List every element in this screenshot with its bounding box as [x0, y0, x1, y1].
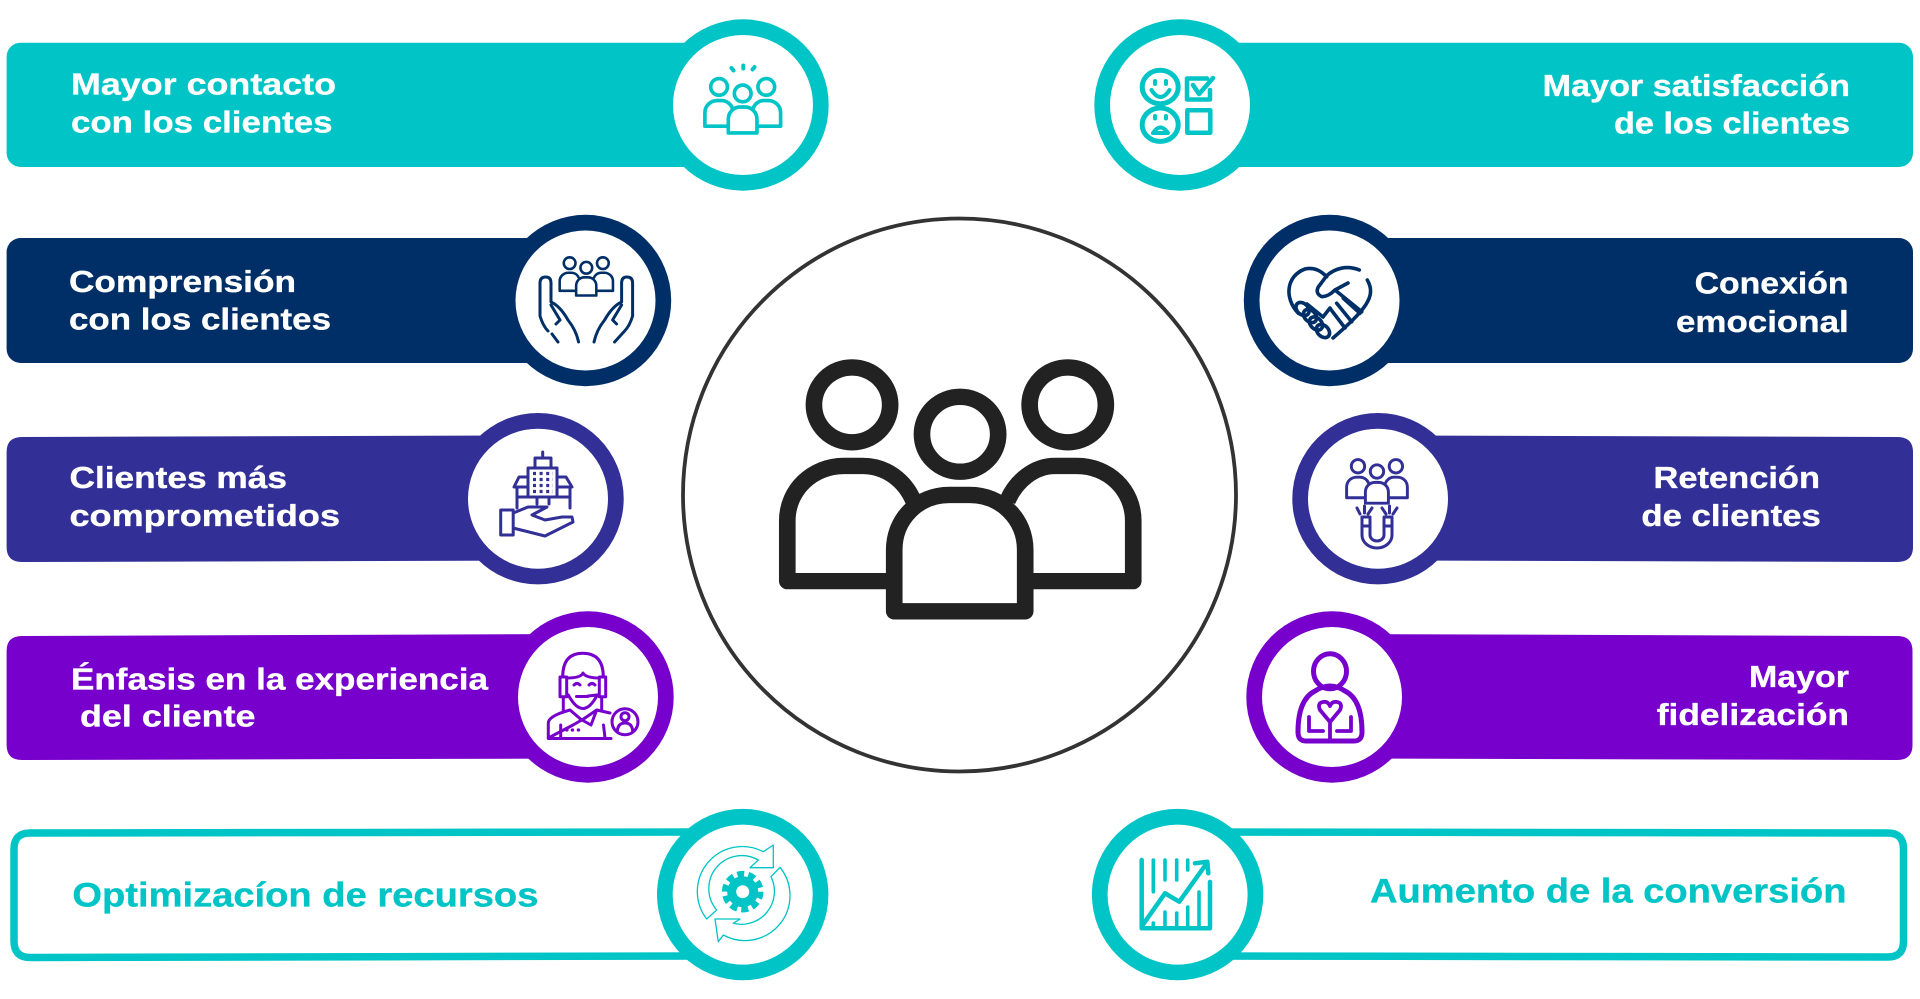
text: de los clientes: de los clientes: [1614, 106, 1850, 140]
icon: customer service agent: [548, 653, 638, 738]
text: con los clientes: con los clientes: [69, 302, 331, 336]
icon: gear with cycle arrows: [697, 845, 790, 942]
heading: Énfasis en la experiencia: Énfasis en la experiencia: [71, 661, 489, 696]
panel: Mayor contacto con los clientes: [7, 19, 829, 191]
icon: people and magnet: [1347, 460, 1407, 548]
heading: Optimizacíon de recursos: Optimizacíon de recursos: [72, 876, 538, 914]
icon: people with rays: [705, 66, 781, 133]
text: fidelización: fidelización: [1657, 697, 1849, 732]
icon: person with heart: [1298, 654, 1362, 741]
icon: group of three people: [787, 367, 1133, 611]
panel: Comprensión con los clientes: [7, 215, 671, 386]
text: del cliente: del cliente: [80, 699, 256, 734]
icon: hands holding people: [540, 257, 633, 342]
icon: smile and sad faces with checkboxes: [1142, 70, 1213, 141]
heading: Conexión: Conexión: [1695, 266, 1849, 300]
heading: Mayor satisfacción: Mayor satisfacción: [1543, 68, 1850, 103]
icon: rising line chart: [1142, 860, 1210, 928]
heading: Aumento de la conversión: Aumento de la conversión: [1370, 873, 1846, 911]
text: de clientes: de clientes: [1641, 498, 1821, 533]
text: emocional: emocional: [1676, 304, 1849, 339]
icon: building in hand: [501, 452, 573, 536]
panel: Mayor fidelización: [1246, 611, 1912, 783]
central circle with people icon: [683, 218, 1236, 772]
panel: Clientes más comprometidos: [7, 413, 624, 584]
panel: Optimización de recursos: [14, 809, 828, 980]
panel: Retención de clientes: [1292, 413, 1913, 584]
heading: Mayor contacto: Mayor contacto: [71, 66, 336, 102]
heading: Comprensión: Comprensión: [69, 264, 296, 299]
panel: Conexión emocional: [1244, 215, 1913, 386]
text: con los clientes: con los clientes: [71, 105, 332, 140]
heading: Mayor: Mayor: [1749, 659, 1849, 694]
heading: Retención: Retención: [1654, 460, 1820, 495]
panel: Aumento de la conversión: [1092, 809, 1904, 980]
heading: Clientes más: Clientes más: [70, 460, 287, 495]
panel: Énfasis en la experiencia del cliente: [7, 611, 674, 783]
panel: Mayor satisfacción de los clientes: [1094, 19, 1913, 191]
text: comprometidos: comprometidos: [70, 498, 340, 533]
icon: heart handshake: [1289, 268, 1371, 340]
